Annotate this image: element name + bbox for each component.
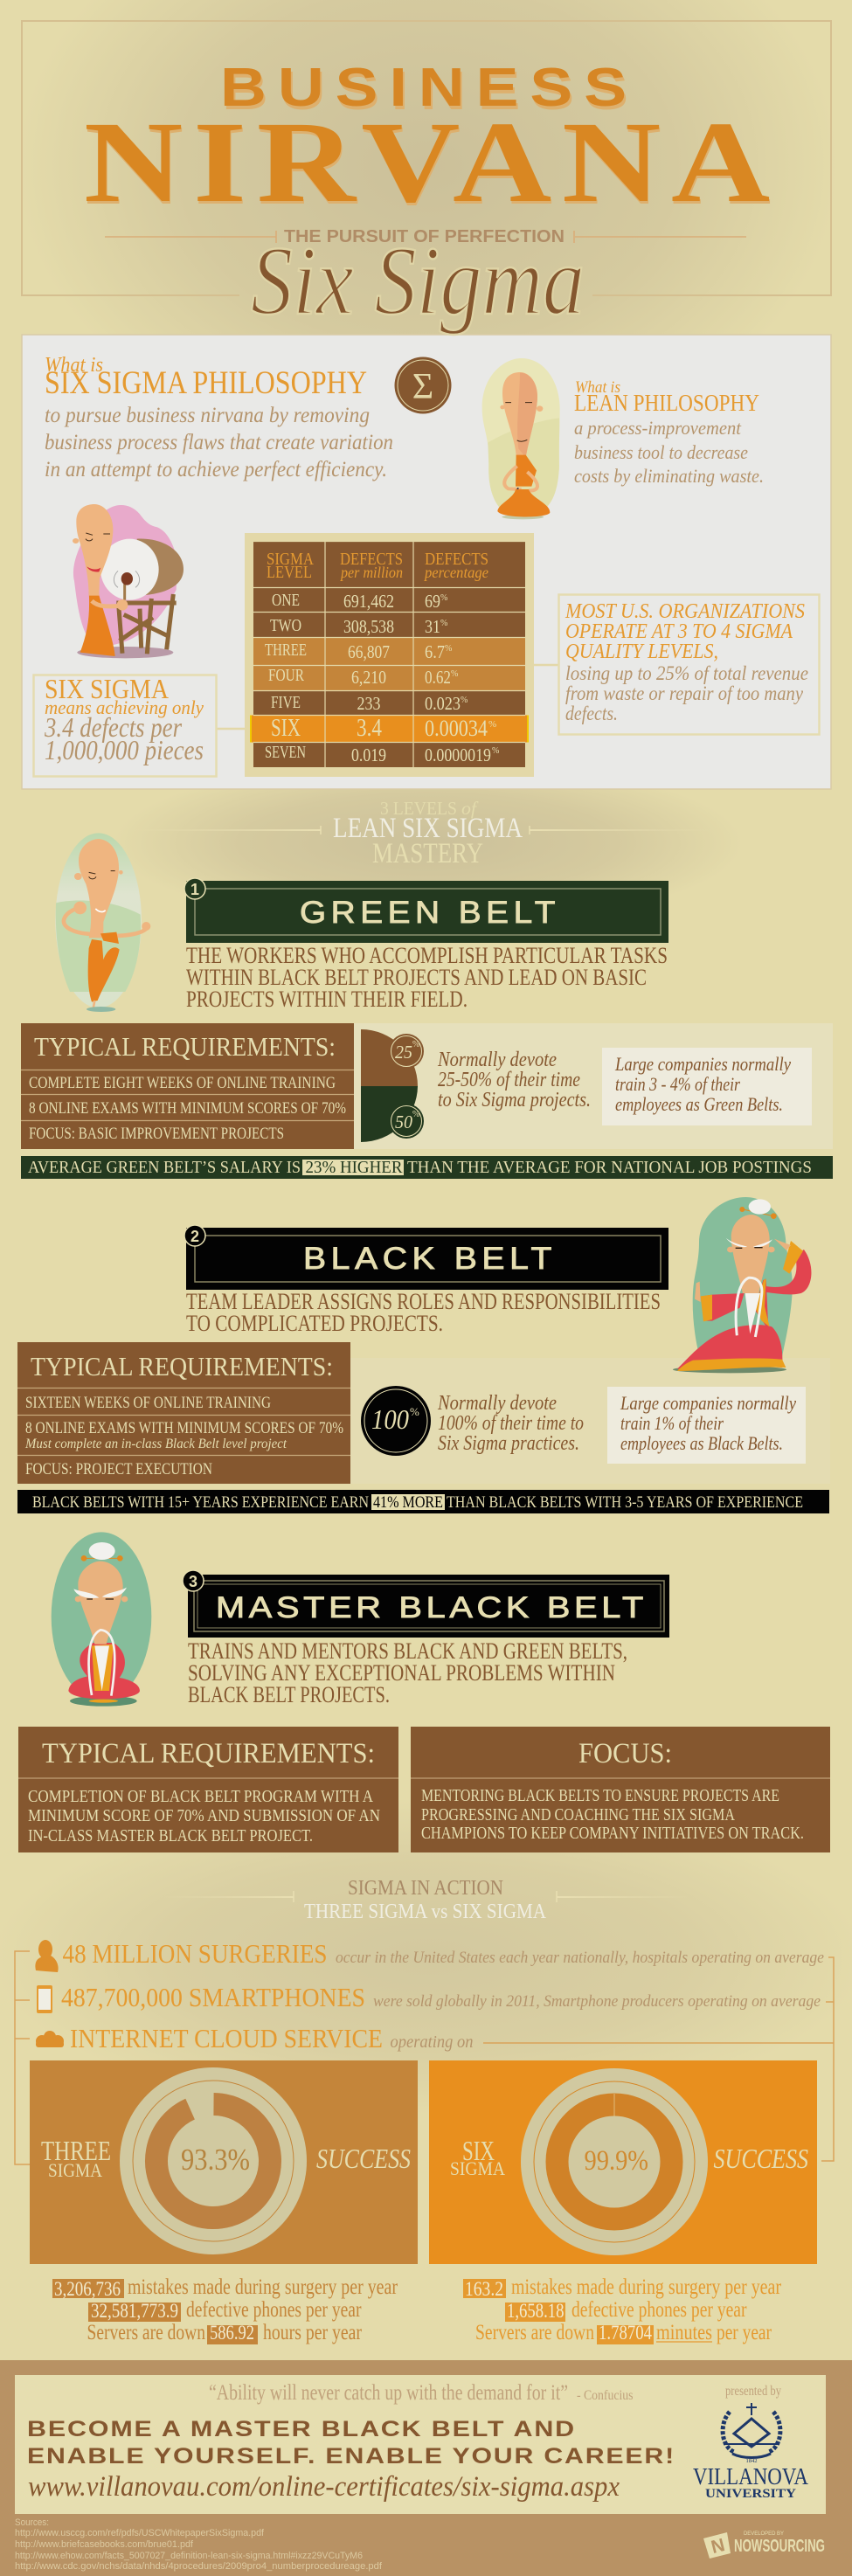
text: normally devote: Six Sigma practices.: [438, 1432, 579, 1455]
heading: 3 levels of lean six sigma mastery: [131, 798, 712, 869]
chart: 25-50 percent half pie: %: [412, 1040, 419, 1049]
table rows: %: [451, 669, 458, 679]
bar: black belt experience: BLACK BELTS WITH 15+ YEARS EXPERIENCE EARN: [32, 1493, 369, 1512]
chart: 100 percent badge: %: [410, 1405, 419, 1418]
stat: smartphones: [61, 1982, 821, 2012]
stat: smartphones: were sold globally in 2011, Smartphone producers operating on average: [373, 1992, 821, 2011]
panel: call to action: [15, 2375, 826, 2514]
call to action heading: BECOME A MASTER BLACK BELT AND: [27, 2417, 576, 2441]
panel: three sigma donut: [30, 2060, 418, 2264]
logo: nowsourcing: N: [710, 2535, 727, 2558]
text: normally devote: [437, 1049, 591, 1111]
table rows: TWO: [270, 616, 301, 635]
title: Business Nirvana: [84, 58, 780, 226]
stats: three sigma results: 3,206,736: [54, 2278, 121, 2300]
stat: smartphones: 487,700,000 SMARTPHONES: [61, 1982, 365, 2012]
table rows: 0.0000019: [425, 744, 491, 765]
stats: six sigma results: mistakes made during surgery per year: [511, 2275, 782, 2299]
stats: six sigma results: Servers are down: [475, 2321, 594, 2344]
call to action heading: ENABLE YOURSELF. ENABLE YOUR CAREER!: [27, 2444, 675, 2469]
panel: black belt requirements: [17, 1342, 350, 1484]
table rows: %: [440, 619, 447, 628]
text block: what is lean philosophy: costs by eliminating waste.: [574, 465, 764, 487]
presenter: villanova university: VILLANOVA: [693, 2463, 808, 2489]
panel: green belt requirements: [21, 1023, 354, 1149]
callout: most organizations: MOST U.S. ORGANIZATIONS: [565, 600, 805, 623]
table rows: 31: [425, 616, 440, 637]
chart: 25-50 percent half pie: 50: [395, 1111, 412, 1132]
box: large companies: Large companies normally: [614, 1053, 791, 1075]
title line: Business: BUSINESS: [220, 58, 638, 118]
text block: what is six sigma philosophy: SIX SIGMA PHILOSOPHY: [45, 365, 367, 401]
box: large companies: train 3 - 4% of their: [615, 1073, 740, 1095]
banner: master black belt: MASTER BLACK BELT: [216, 1591, 648, 1624]
stat: surgeries: 48 MILLION SURGERIES: [63, 1938, 327, 1969]
illustration: green belt monk: [55, 833, 150, 1012]
stat: surgeries: [63, 1938, 824, 1969]
callout: most organizations: from waste or repair of too many: [565, 682, 804, 704]
text: normally devote: Normally devote: [437, 1392, 557, 1415]
table rows: %: [440, 593, 447, 603]
description: master black belt: BLACK BELT PROJECTS.: [188, 1682, 390, 1707]
panel: three sigma donut: THREE: [41, 2135, 111, 2166]
text: normally devote: to Six Sigma projects.: [438, 1089, 591, 1111]
panel: black belt requirements: 8 ONLINE EXAMS WITH MINIMUM SCORES OF 70%: [25, 1419, 343, 1437]
stat: cloud service: INTERNET CLOUD SERVICE: [70, 2023, 383, 2053]
text block: what is lean philosophy: LEAN PHILOSOPHY: [574, 390, 759, 416]
stats: six sigma results: 1.78704: [599, 2322, 652, 2344]
panel: six sigma donut: [429, 2060, 817, 2264]
icon: villanova crest: 1842: [746, 2458, 757, 2464]
icon: sigma badge: Σ: [412, 367, 433, 407]
icon: surgeon: [35, 1940, 59, 1972]
icon: cloud: [36, 2031, 64, 2047]
panel: black belt requirements: Must complete an in-class Black Belt level project: [24, 1437, 287, 1451]
table rows: 0.019: [351, 744, 386, 765]
illustration: black belt monk: [673, 1197, 811, 1373]
stat: cloud service: operating on: [390, 2032, 474, 2052]
chart: 100 percent badge: [361, 1386, 431, 1456]
table rows: ONE: [272, 591, 300, 610]
callout: most organizations: OPERATE AT 3 TO 4 SIGMA: [565, 620, 793, 643]
panel: master requirements: TYPICAL REQUIREMENTS:: [42, 1738, 375, 1769]
description: black belt: [186, 1289, 661, 1336]
description: master black belt: SOLVING ANY EXCEPTIONAL PROBLEMS WITHIN: [188, 1660, 615, 1686]
table rows: 6.7: [425, 641, 445, 662]
table header: DEFECTS: [340, 550, 403, 569]
section: green belt: [21, 833, 833, 1179]
chart: 93.3 percent donut: [156, 2104, 270, 2218]
bar: green belt salary: 23% HIGHER: [306, 1158, 403, 1177]
panel: green belt requirements: 8 ONLINE EXAMS WITH MINIMUM SCORES OF 70%: [29, 1099, 346, 1118]
stats: six sigma results: per year: [717, 2321, 772, 2344]
panel: six sigma donut: SIX: [462, 2135, 495, 2166]
text: normally devote: [437, 1392, 584, 1455]
banner: black belt: [184, 1225, 668, 1290]
call to action heading: [27, 2417, 675, 2469]
description: master black belt: [188, 1638, 627, 1707]
chart: 99.9 percent donut: [558, 2104, 671, 2219]
callout: six sigma defects: 3.4 defects per: [44, 711, 182, 743]
description: green belt: WITHIN BLACK BELT PROJECTS AND LEAD ON BASIC: [186, 965, 647, 990]
table rows: %: [445, 644, 452, 654]
stats: three sigma results: hours per year: [263, 2321, 363, 2344]
chart: 25-50 percent half pie: %: [412, 1110, 419, 1119]
panel: master requirements: COMPLETION OF BLACK BELT PROGRAM WITH A: [28, 1787, 373, 1806]
sources: http://www.cdc.gov/nchs/data/nhds/4procedures/2009pro4_numberprocedureage.pdf: [15, 2561, 383, 2572]
text block: what is six sigma philosophy: [45, 354, 393, 481]
bar: green belt salary: [21, 1156, 833, 1179]
callout: six sigma defects: SIX SIGMA: [45, 673, 169, 704]
callout: six sigma defects: 1,000,000 pieces: [45, 734, 204, 765]
callout: most organizations: [534, 594, 820, 734]
panel: philosophy: [22, 227, 831, 789]
panel: master focus: FOCUS:: [578, 1738, 672, 1769]
stats: six sigma results: [463, 2275, 782, 2344]
table rows: [265, 591, 499, 765]
text block: what is lean philosophy: [574, 378, 764, 487]
stats: three sigma results: [52, 2275, 398, 2344]
panel: master requirements: [18, 1727, 398, 1852]
quote: - Confucius: [577, 2388, 633, 2403]
illustration: lean monk: [482, 358, 560, 519]
presenter: villanova university: UNIVERSITY: [705, 2487, 796, 2501]
box: large companies: train 1% of their: [620, 1412, 724, 1434]
table header: [267, 550, 488, 582]
table rows: 0.00034: [425, 716, 488, 741]
callout: most organizations: defects.: [565, 703, 618, 724]
table rows: 66,807: [348, 641, 390, 662]
callout: six sigma defects: means achieving only: [45, 696, 204, 718]
panel: green belt requirements: COMPLETE EIGHT WEEKS OF ONLINE TRAINING: [29, 1074, 336, 1092]
section: sigma in action: [15, 1938, 834, 2344]
sources: http://www.ehow.com/facts_5007027_definition-lean-six-sigma.html#ixzz29VCuTyM6: [15, 2551, 363, 2561]
panel: three sigma donut: SUCCESS: [316, 2143, 411, 2174]
box: large companies: [607, 1387, 806, 1464]
panel: six sigma donut: SUCCESS: [713, 2143, 808, 2174]
table rows: FIVE: [271, 693, 301, 712]
text block: what is six sigma philosophy: business process flaws that create variation: [45, 431, 393, 454]
table rows: THREE: [265, 641, 307, 660]
panel: master focus: PROGRESSING AND COACHING THE SIX SIGMA: [421, 1805, 735, 1825]
icon: smartphone: [37, 1985, 52, 2013]
footer: [0, 2360, 852, 2576]
table rows: %: [492, 746, 499, 756]
text: normally devote: 100% of their time to: [438, 1412, 584, 1435]
callout: most organizations: QUALITY LEVELS,: [565, 641, 718, 663]
title line: Nirvana: NIRVANA: [84, 97, 780, 226]
stats: six sigma results: minutes: [656, 2321, 712, 2344]
table header: LEVEL: [267, 563, 312, 582]
stats: six sigma results: defective phones per year: [571, 2298, 747, 2322]
stats: six sigma results: 163.2: [465, 2278, 503, 2300]
heading: 3 levels of lean six sigma mastery: 3 LEVELS: [380, 798, 457, 819]
panel: black belt requirements: FOCUS: PROJECT EXECUTION: [25, 1460, 212, 1478]
quote: “Ability will never catch up with the demand for it”: [209, 2381, 568, 2405]
box: large companies: [602, 1048, 812, 1125]
table header: percentage: [423, 564, 488, 581]
stats: three sigma results: 32,581,773.9: [91, 2300, 178, 2322]
banner: master black belt: [183, 1570, 669, 1638]
panel backdrop: black belt time and training: [350, 1358, 830, 1484]
table header: per million: [339, 564, 403, 581]
sources: http://www.briefcasebooks.com/brue01.pdf: [15, 2539, 194, 2550]
table header: DEFECTS: [425, 550, 488, 569]
heading: sigma in action: [163, 1877, 690, 1923]
table rows: SEVEN: [265, 743, 306, 762]
stats: three sigma results: defective phones per year: [186, 2298, 362, 2322]
panel: three sigma donut: SIGMA: [48, 2159, 102, 2181]
panel: master requirements: MINIMUM SCORE OF 70% AND SUBMISSION OF AN: [28, 1806, 380, 1825]
text block: what is lean philosophy: a process-improvement: [574, 417, 742, 439]
table rows: 0.023: [425, 693, 461, 714]
table rows: 6,210: [351, 667, 386, 688]
link: www.villanovau.com/online-certificates/six-sigma.aspx: [28, 2471, 620, 2503]
banner: black belt: 2: [190, 1228, 199, 1245]
sources: [15, 2517, 383, 2572]
stats: three sigma results: Servers are down: [87, 2321, 205, 2344]
bar: green belt salary: THAN THE AVERAGE FOR NATIONAL JOB POSTINGS: [407, 1158, 812, 1177]
heading: sigma in action: SIGMA IN ACTION: [348, 1877, 503, 1900]
banner: black belt: BLACK BELT: [303, 1242, 557, 1276]
box: large companies: employees as Green Belts.: [615, 1093, 783, 1115]
box: large companies: employees as Black Belts.: [620, 1432, 783, 1454]
subtitle: the pursuit of perfection: [105, 227, 746, 246]
table rows: 0.62: [425, 667, 451, 688]
description: green belt: [186, 943, 668, 1012]
description: green belt: PROJECTS WITHIN THEIR FIELD.: [186, 987, 468, 1012]
table rows: 691,462: [343, 591, 394, 612]
text block: what is lean philosophy: What is: [575, 378, 620, 397]
text block: what is six sigma philosophy: to pursue business nirvana by removing: [45, 404, 370, 427]
chart: 25-50 percent half pie: 25: [395, 1042, 412, 1063]
text: normally devote: 25-50% of their time: [438, 1069, 580, 1091]
text block: what is six sigma philosophy: What is: [45, 354, 103, 377]
heading: 3 levels of lean six sigma mastery: LEAN SIX SIGMA: [333, 813, 523, 844]
illustration: monk with drum: [73, 504, 184, 658]
description: green belt: THE WORKERS WHO ACCOMPLISH PARTICULAR TASKS: [186, 943, 668, 968]
banner: green belt: 1: [190, 881, 199, 898]
heading: sigma in action: THREE SIGMA vs SIX SIGMA: [304, 1901, 547, 1923]
text block: what is six sigma philosophy: in an attempt to achieve perfect efficiency.: [45, 458, 387, 481]
banner: green belt: [184, 878, 668, 943]
panel: six sigma donut: 99.9%: [584, 2145, 648, 2177]
chart: 25-50 percent half pie: [361, 1029, 424, 1142]
panel: green belt requirements: FOCUS: BASIC IMPROVEMENT PROJECTS: [29, 1125, 284, 1143]
table rows: %: [461, 696, 468, 705]
presenter: villanova university: presented by: [725, 2384, 781, 2399]
bar: black belt experience: 41% MORE: [373, 1493, 443, 1512]
section: black belt: [17, 1197, 830, 1513]
stat: surgeries: occur in the United States each year nationally, hospitals operating on average: [336, 1949, 824, 1967]
banner: master black belt: 3: [189, 1573, 197, 1590]
text block: what is lean philosophy: business tool to decrease: [574, 441, 748, 463]
bar: green belt salary: AVERAGE GREEN BELT’S SALARY IS: [28, 1158, 301, 1177]
panel: green belt time and training: [354, 1023, 833, 1149]
panel: green belt requirements: TYPICAL REQUIREMENTS:: [34, 1031, 336, 1062]
table header: SIGMA: [267, 550, 314, 569]
table rows: 308,538: [343, 616, 394, 637]
table rows: 69: [425, 591, 440, 612]
box: large companies: Large companies normally: [620, 1392, 796, 1414]
text: normally devote: Normally devote: [437, 1049, 557, 1071]
banner: green belt: GREEN BELT: [300, 896, 560, 930]
illustration: master monk: [52, 1532, 151, 1707]
logo: nowsourcing: DEVELOPED BY: [744, 2531, 784, 2537]
table rows: %: [488, 719, 496, 730]
panel: black belt requirements: SIXTEEN WEEKS OF ONLINE TRAINING: [25, 1394, 271, 1412]
description: black belt: TEAM LEADER ASSIGNS ROLES AND RESPONSIBILITIES: [186, 1289, 661, 1314]
table rows: 233: [357, 693, 381, 714]
stats: three sigma results: mistakes made during surgery per year: [128, 2275, 398, 2299]
callout: six sigma defects: [33, 673, 245, 776]
sources: Sources:: [15, 2517, 49, 2528]
description: master black belt: TRAINS AND MENTORS BLACK AND GREEN BELTS,: [188, 1638, 627, 1664]
description: black belt: TO COMPLICATED PROJECTS.: [186, 1311, 443, 1336]
panel: six sigma donut: SIGMA: [450, 2157, 505, 2179]
table rows: FOUR: [268, 666, 304, 685]
script title: Six Sigma: Six Sigma: [251, 227, 585, 336]
panel: three sigma donut: 93.3%: [181, 2143, 250, 2177]
panel: black belt requirements: TYPICAL REQUIREMENTS:: [31, 1351, 333, 1381]
sources: http://www.usccg.com/ref/pdfs/USCWhitepaperSixSigma.pdf: [15, 2528, 265, 2538]
section: master black belt: [18, 1532, 830, 1852]
presenter: villanova university: [693, 2384, 808, 2501]
panel: master focus: [411, 1727, 830, 1852]
table rows: SIX: [271, 715, 301, 742]
stats: three sigma results: 586.92: [210, 2322, 254, 2344]
subtitle: the pursuit of perfection: THE PURSUIT OF PERFECTION: [284, 227, 565, 246]
stats: six sigma results: 1,658.18: [507, 2300, 565, 2322]
heading: 3 levels of lean six sigma mastery: of: [461, 798, 479, 819]
heading: 3 levels of lean six sigma mastery: MASTERY: [372, 838, 483, 869]
table: sigma levels: [245, 533, 534, 777]
table rows: 3.4: [357, 715, 382, 742]
panel: master requirements: IN-CLASS MASTER BLACK BELT PROJECT.: [28, 1826, 313, 1845]
icon: sigma badge: [395, 357, 451, 414]
callout: most organizations: losing up to 25% of total revenue: [565, 662, 808, 684]
bar: black belt experience: [17, 1490, 829, 1513]
chart: 100 percent badge: 100: [371, 1403, 409, 1435]
logo: nowsourcing: [703, 2531, 825, 2559]
